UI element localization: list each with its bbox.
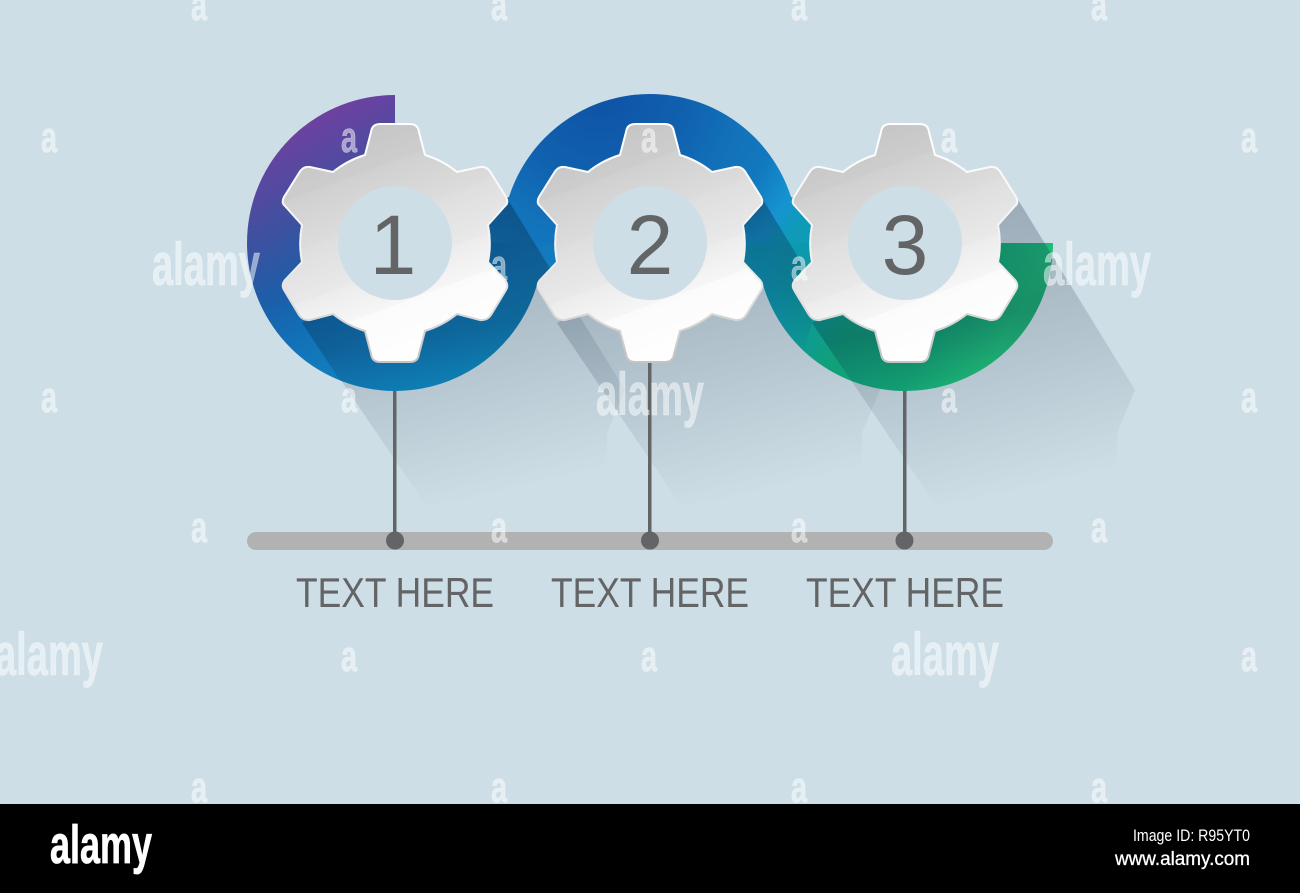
watermarks: a: [641, 632, 657, 681]
watermarks: a: [791, 241, 807, 290]
watermarks: a: [791, 763, 807, 812]
watermarks: a: [791, 503, 807, 552]
watermarks: a: [1091, 503, 1107, 552]
watermarks: a: [341, 113, 357, 162]
gear 3 with number: [793, 124, 1017, 362]
watermarks: a: [341, 632, 357, 681]
label 1: TEXT HERE: [296, 569, 494, 616]
ribbon: winding purple to blue to green band: [247, 94, 1053, 391]
watermarks: a: [941, 373, 957, 422]
ribbon segment around gear 3: [735, 243, 1053, 391]
watermarks: a: [341, 373, 357, 422]
watermarks: alamy: [596, 361, 704, 428]
image id: Image ID: R95YT0: [1133, 826, 1250, 845]
ribbon segment over gear 2: [480, 94, 820, 243]
watermarks: a: [941, 113, 957, 162]
label 3: TEXT HERE: [806, 569, 1004, 616]
gear 2 with number: [538, 124, 762, 362]
long shadows behind gears: [302, 190, 1135, 507]
watermarks: alamy: [891, 621, 999, 688]
website: www.alamy.com: [1114, 849, 1250, 870]
watermarks: a: [191, 503, 207, 552]
watermarks: a: [491, 503, 507, 552]
label 2: TEXT HERE: [551, 569, 749, 616]
watermarks: a: [41, 113, 57, 162]
number 2: 2: [627, 198, 673, 292]
ribbon segment around gear 1: [247, 95, 565, 391]
watermarks: alamy: [0, 621, 103, 688]
watermarks: a: [641, 113, 657, 162]
footer bar: [0, 804, 1300, 893]
watermarks: a: [41, 373, 57, 422]
timeline bar: [247, 532, 1053, 550]
watermarks: a: [491, 763, 507, 812]
watermarks: a: [191, 763, 207, 812]
gear 1 with number: [283, 124, 507, 362]
footer logo: alamy: [50, 815, 152, 875]
watermarks: a: [1241, 373, 1257, 422]
timeline dot 2: [641, 532, 659, 550]
timeline dot 3: [896, 532, 914, 550]
watermarks: a: [1241, 113, 1257, 162]
watermarks: alamy: [152, 231, 260, 298]
gear shadows cast on ribbon: [302, 200, 1052, 390]
number 1: 1: [370, 198, 416, 292]
watermarks: a: [1241, 632, 1257, 681]
connector line 1: [393, 385, 396, 540]
number 3: 3: [882, 198, 928, 292]
connector line 3: [903, 385, 906, 540]
watermarks: alamy: [1043, 231, 1151, 298]
timeline dot 1: [386, 532, 404, 550]
watermarks: a: [491, 241, 507, 290]
connector line 2: [648, 355, 652, 540]
watermarks: a: [1091, 763, 1107, 812]
